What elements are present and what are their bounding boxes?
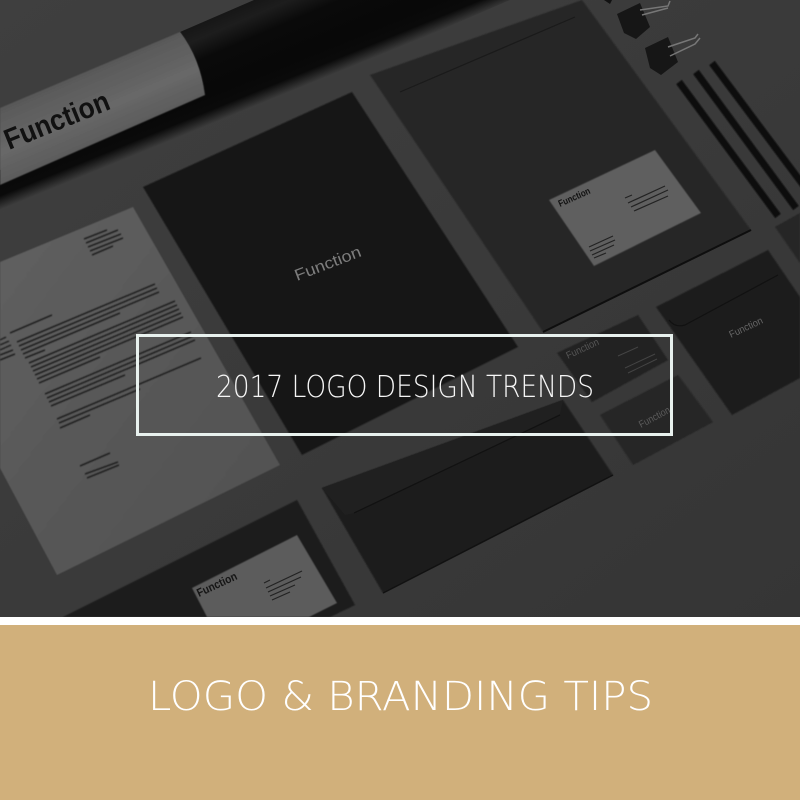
tube shadow bbox=[0, 0, 510, 222]
small envelope right bbox=[656, 250, 800, 415]
business card front: Function bbox=[565, 337, 601, 362]
binder clips bbox=[604, 0, 700, 75]
small envelope bottom with address label bbox=[63, 500, 355, 617]
large envelope bbox=[370, 0, 751, 332]
white divider band bbox=[0, 617, 800, 625]
business card front bbox=[557, 315, 668, 402]
letterhead sheet bbox=[0, 207, 280, 575]
envelope address label bbox=[549, 150, 701, 266]
gray tube with Function wordmark bbox=[0, 32, 205, 185]
envelope address label: Function bbox=[557, 186, 592, 210]
pencils bbox=[679, 63, 800, 216]
small envelope right: Function bbox=[728, 316, 765, 341]
tan footer band bbox=[0, 625, 800, 800]
black folder bbox=[143, 92, 518, 455]
black tube bbox=[180, 0, 434, 98]
envelope flap line bbox=[400, 17, 575, 92]
business card back: Function bbox=[637, 405, 672, 431]
gray tube with Function wordmark: Function bbox=[0, 85, 115, 156]
small envelope bottom with address label: Function bbox=[195, 571, 239, 600]
photo background panel bbox=[0, 0, 800, 617]
title text: 2017 LOGO DESIGN TRENDS bbox=[216, 370, 594, 405]
stationery corner right bbox=[775, 213, 800, 263]
black folder: Function bbox=[292, 244, 364, 285]
long envelope bbox=[322, 400, 613, 593]
title frame bbox=[138, 336, 672, 434]
letterhead address and body copy bbox=[0, 230, 201, 478]
business card back bbox=[600, 375, 713, 465]
envelope bottom edge bbox=[543, 230, 751, 332]
footer text: LOGO & BRANDING TIPS bbox=[148, 674, 653, 720]
